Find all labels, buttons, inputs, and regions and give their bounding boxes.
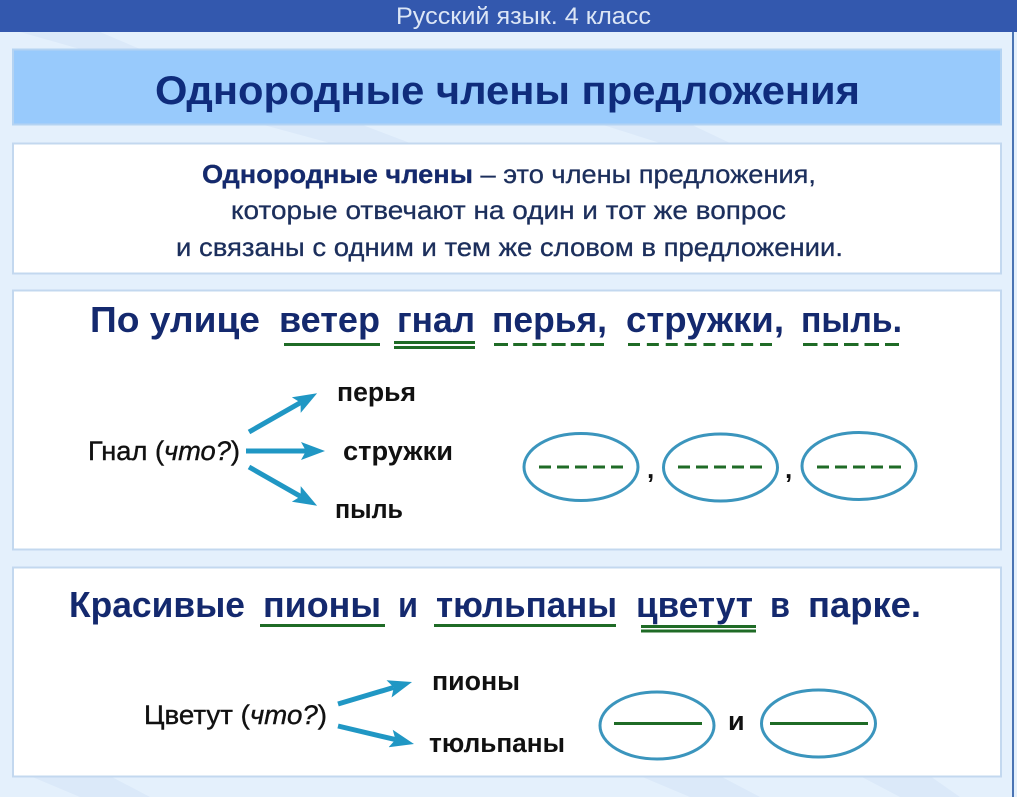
word: стружки: стружки [343,436,453,466]
definition line 1: Однородные члены – это члены предложения, [202,159,816,189]
sentence 2: цветут [636,584,753,625]
sentence 2: и [398,584,418,625]
title panel [13,50,1001,124]
sentence 1: пыль. [801,299,902,340]
word: перья: перья [337,377,416,407]
panel: example 1 [13,290,1001,550]
diagram: three ovals with dashed lines: , [647,454,654,484]
diagram: three ovals with dashed lines [524,432,916,501]
label: Цветут (что?): Цветут (что?) [144,700,327,730]
header bar [0,0,1017,32]
diagram: two ovals with solid lines: и [728,706,745,736]
underlines sentence 1 [284,342,899,348]
sentence 1: ветер [279,299,380,340]
definition line 2: которые отвечают на один и тот же вопрос [231,195,786,225]
panel: example 2 [13,568,1001,776]
sentence 2 [69,584,921,625]
label: Гнал (что?): Гнал (что?) [88,436,240,466]
word: пыль: пыль [335,494,403,524]
header text: Русский язык. 4 класс [396,3,651,30]
sentence 1: По улице [90,299,260,340]
diagram: two ovals with solid lines [600,690,876,759]
word: пионы: пионы [432,666,520,696]
sentence 2: пионы [263,584,381,625]
sentence 1: перья, [492,299,607,340]
sentence 2: тюльпаны [436,584,617,625]
definition line 3: и связаны с одним и тем же словом в предложении. [176,232,843,262]
title: Однородные члены предложения [155,69,860,113]
sentence 2: Красивые [69,584,245,625]
underlines sentence 2 [260,626,756,631]
panel: definition [13,144,1001,274]
sentence 2: в [770,584,790,625]
sentence 2: парке. [808,584,921,625]
sentence 1: стружки, [626,299,784,340]
word: тюльпаны: тюльпаны [429,728,565,758]
arrows to words [246,403,306,496]
arrows to words 2 [338,687,396,740]
sentence 1: гнал [397,299,475,340]
sentence 1 [90,299,902,340]
diagram: three ovals with dashed lines: , [785,454,792,484]
